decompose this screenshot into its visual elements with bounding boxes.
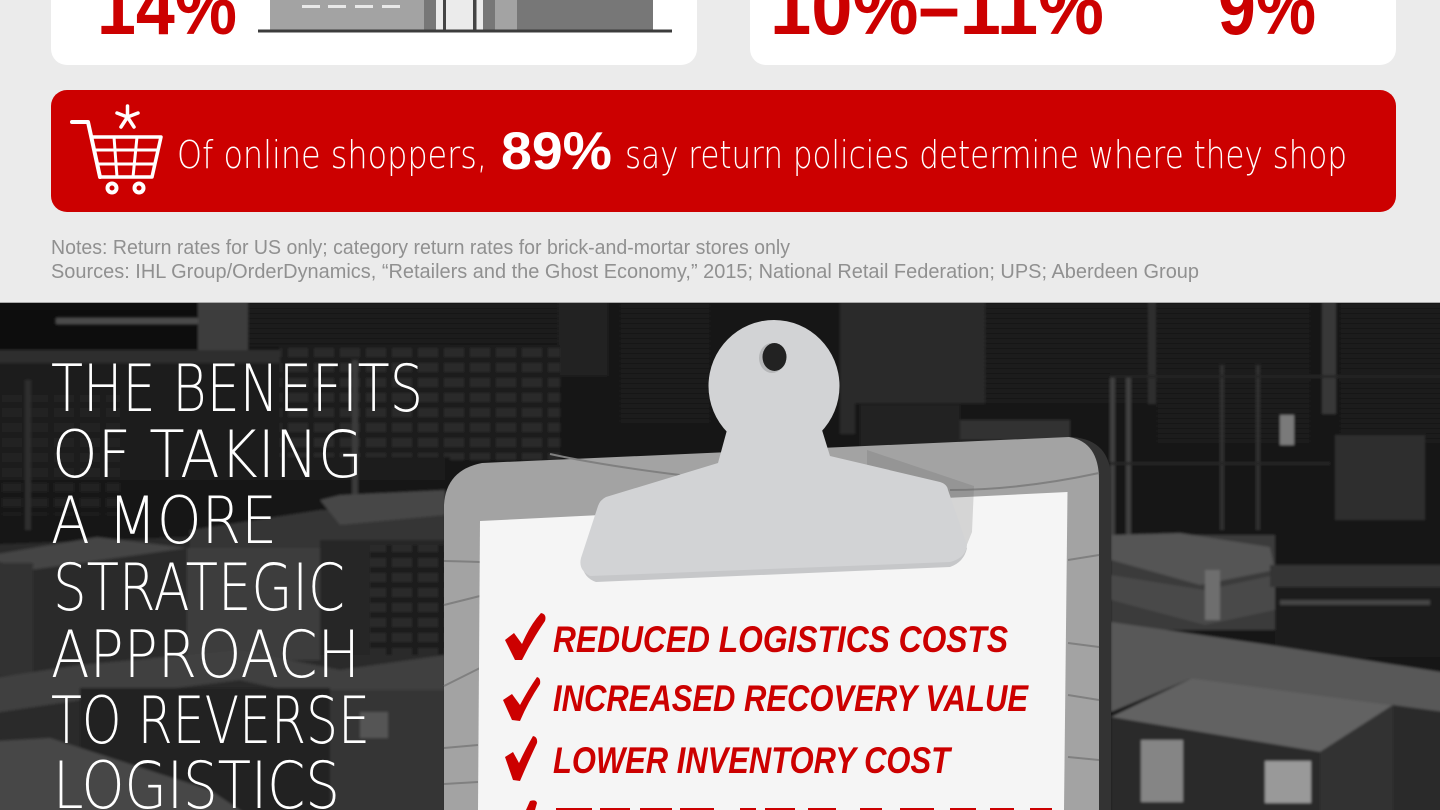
heading: the benefits of taking a more strategic approach: TO REVERSE (51, 684, 370, 759)
banner text: Of online shoppers, (177, 133, 487, 177)
checklist item 2: INCREASED RECOVERY VALUE (553, 678, 1029, 719)
clipboard board (444, 437, 1099, 810)
icon: shopping cart with asterisk (72, 106, 161, 192)
heading: the benefits of taking a more strategic approach (51, 352, 423, 810)
checklist item 4, cut off by page edge (526, 800, 1052, 810)
page background (0, 0, 1440, 303)
checklist item 1: REDUCED LOGISTICS COSTS (553, 619, 1008, 660)
notes and sources: Sources: IHL Group/OrderDynamics, “Retailers and the Ghost Economy,” 2015; National Retail Federation; UPS; Aberdeen Group (51, 261, 1199, 283)
metal clip (580, 320, 967, 582)
checklist item 3: LOWER INVENTORY COST (553, 740, 953, 781)
clipboard dark edge (1050, 437, 1111, 810)
callout: return policies banner (51, 90, 1396, 212)
panel: warehouse photo background (0, 290, 1440, 810)
icon: store front (258, 0, 672, 32)
checklist item 1 (505, 613, 1008, 660)
heading: the benefits of taking a more strategic approach: OF TAKING (52, 418, 363, 493)
banner text: 89% (501, 122, 612, 181)
notes and sources (51, 237, 1199, 283)
heading: the benefits of taking a more strategic approach: THE BENEFITS (51, 352, 423, 427)
panel: in-store return rate (51, 0, 697, 65)
panel: online return rates (750, 0, 1396, 65)
notes and sources: Notes: Return rates for US only; category return rates for brick-and-mortar stores only (51, 237, 790, 259)
heading: the benefits of taking a more strategic approach: APPROACH (51, 618, 360, 693)
paper sheet (478, 492, 1068, 810)
divider above photo (0, 302, 1440, 304)
clip shadow (867, 450, 974, 552)
board wood grain (444, 454, 1099, 784)
heading: the benefits of taking a more strategic approach: STRATEGIC (53, 551, 345, 626)
heading: the benefits of taking a more strategic approach: A MORE (51, 484, 277, 559)
panel: clipboard checklist (444, 320, 1111, 810)
